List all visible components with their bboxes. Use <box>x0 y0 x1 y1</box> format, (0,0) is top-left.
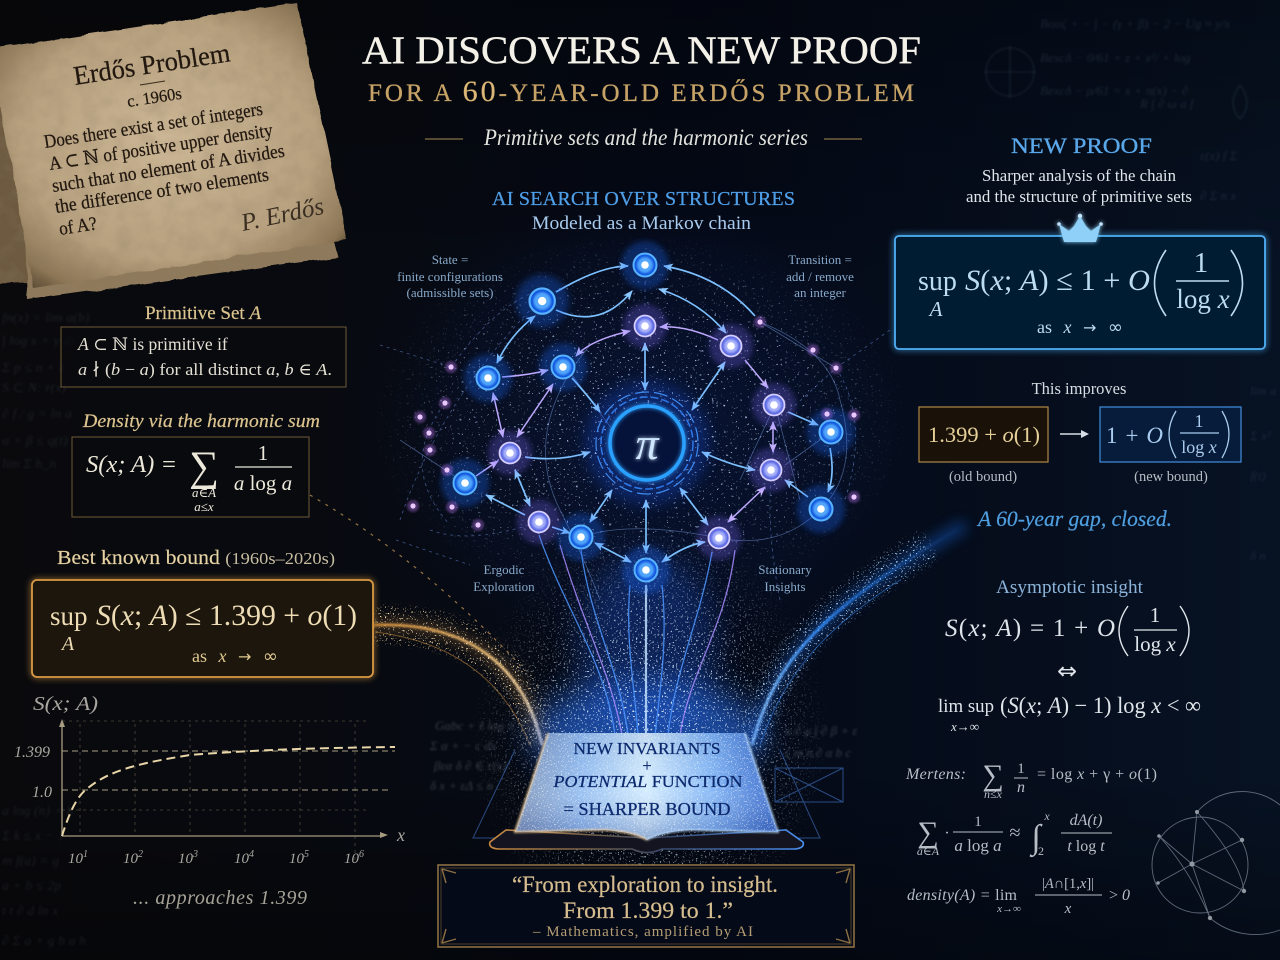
background handwritten math, left and right margins: α + β ≤ q(t) <box>2 434 68 449</box>
book page text: NEW INVARIANTS <box>574 739 720 758</box>
signature: P. Erdős <box>238 193 326 237</box>
formula: Mertens: ∑ <box>982 759 1004 792</box>
axis labels: 1 <box>83 849 88 860</box>
annotation: state: finite configurations <box>397 269 503 284</box>
background handwritten math, left and right margins: βεα δ ∂ ∈ r(x) <box>433 758 507 773</box>
axis labels: 6 <box>359 849 364 860</box>
formula: Mertens: = log x + γ + o(1) <box>1037 766 1157 783</box>
background handwritten math, left and right margins: Σ p ≤ n + k <box>1 361 66 376</box>
new bound box: 1 <box>1194 411 1204 431</box>
background handwritten math, left and right margins: ∂ Σ n x <box>1200 188 1236 203</box>
glowing trail: gold, from best-known bound to book <box>310 495 570 760</box>
formula: density limit: > 0 <box>1108 887 1130 904</box>
curve <box>62 747 395 836</box>
background handwritten math, left and right margins: Bexcδ − 0/61 + z + x²/ + log <box>1040 50 1191 65</box>
heading: Erdős Problem: Erdős Problem <box>71 37 232 91</box>
background handwritten math, left and right margins: ∂ f / g = ln a <box>2 407 72 422</box>
formula: Mertens: 1 <box>1017 761 1025 777</box>
axis labels: 10 <box>234 849 254 867</box>
panel: harmonic sum formula: a≤x <box>194 499 214 514</box>
problem statement text: of A? <box>58 213 98 240</box>
panel: best known bound formula: S(x; A) ≤ 1.399 + o(1) <box>96 599 357 632</box>
quote text <box>512 872 778 940</box>
background handwritten math, left and right margins: lim Σ h_n <box>2 457 56 472</box>
panel: primitive set definition: a ∤ (b − a) for all distinct a, b ∈ A. <box>78 360 332 379</box>
heading: AI search over structures: Modeled as a Markov chain <box>532 213 752 234</box>
annotation: stationary insights <box>758 562 812 594</box>
formula: density limit: density(A) = lim <box>907 887 1018 904</box>
fountain of light rising from the book into the network <box>474 526 824 864</box>
formula: sum approximated by integral: · <box>944 825 950 842</box>
node <box>709 324 753 368</box>
annotation: ergodic exploration: Exploration <box>473 579 535 594</box>
node <box>749 448 793 492</box>
formula: sum approximated by integral: t log t <box>1067 838 1105 855</box>
axis labels: 10 <box>123 849 143 867</box>
panel: harmonic sum formula: a log a <box>234 471 292 495</box>
annotation: ergodic exploration: Ergodic <box>484 562 525 577</box>
panel: asymptotic insight: lim sup <box>938 696 994 717</box>
date: c. 1960s <box>126 84 183 111</box>
panel: asymptotic insight: (S(x; A) − 1) log x < ∞ <box>1000 693 1201 718</box>
axis labels: 10 <box>178 849 198 867</box>
panel: new proof bound formula: log x <box>1176 284 1230 314</box>
formula: density limit: |A∩[1,x]| <box>1042 876 1094 892</box>
problem statement text: A ⊂ ℕ of positive upper density <box>48 120 275 175</box>
new bound box <box>1100 407 1241 462</box>
formula: Mertens: n≤x <box>984 787 1003 801</box>
panel: harmonic sum formula: a∈A <box>192 485 216 500</box>
panel: asymptotic insight: x→∞ <box>950 719 979 734</box>
text: this improves: This improves <box>1032 379 1126 398</box>
small state dots <box>407 316 860 531</box>
panel: new proof bound formula: 1 <box>1194 247 1208 279</box>
new bound box: log x <box>1181 437 1217 457</box>
bound captions <box>949 469 1208 485</box>
background handwritten math, left and right margins: t t ∂ d ln x <box>2 904 59 919</box>
paper note: Erdős problem <box>0 3 347 300</box>
panel: asymptotic insight <box>938 577 1201 734</box>
node <box>464 354 512 402</box>
annotation: transition: an integer <box>794 285 846 300</box>
annotation: stationary insights: Stationary <box>758 562 812 577</box>
background handwritten math, left and right margins: a log (n) + b <box>2 804 74 819</box>
panel: new proof bound formula: A <box>928 297 943 321</box>
panel: asymptotic insight: log x <box>1134 632 1176 656</box>
axis labels: 4 <box>249 849 254 860</box>
book page text <box>552 739 743 819</box>
problem statement text: the difference of two elements <box>54 165 270 218</box>
heading: primitive set: Primitive Set A <box>145 303 261 324</box>
panel: primitive set definition: A ⊂ ℕ is primitive if <box>77 334 228 354</box>
background handwritten math, left and right margins: Σ α + − c dx <box>429 738 497 753</box>
formula: sum approximated by integral: ∫ <box>1029 819 1043 858</box>
book page text: POTENTIAL FUNCTION <box>552 772 743 791</box>
arrow: old to new <box>1060 430 1089 438</box>
panel: harmonic sum formula: ∑ <box>189 444 219 490</box>
panel: best known bound formula: sup <box>50 601 88 631</box>
central pi node <box>585 381 709 505</box>
background handwritten math, left and right margins: ∂ Σ a + g b a h <box>2 934 86 949</box>
node <box>697 516 741 560</box>
background handwritten math, left and right margins: δ x + εΔ ≤ n <box>430 778 493 793</box>
annotation: state: (admissible sets) <box>406 285 494 300</box>
formula: sum approximated by integral: ≈ <box>1010 822 1021 844</box>
quote box <box>438 865 854 947</box>
node <box>516 275 569 328</box>
panel: best known bound formula: A <box>60 633 75 655</box>
formula: sum approximated by integral: a log a <box>954 836 1002 855</box>
axis labels: 10 <box>289 849 309 867</box>
background handwritten math, left and right margins: f(t) <box>1250 468 1266 483</box>
node <box>797 485 845 533</box>
background handwritten math, left and right margins: S ⊂ N: r(x) <box>2 381 67 396</box>
axis labels <box>14 693 405 867</box>
axis labels: 2 <box>138 849 143 860</box>
book page text: = SHARPER BOUND <box>564 799 730 819</box>
formula: sum approximated by integral: ∑ <box>917 816 939 849</box>
icon: wireframe sphere <box>1152 792 1280 935</box>
old bound box: 1.399 + o(1) <box>928 422 1040 447</box>
formula: Mertens: n <box>1017 779 1025 796</box>
background handwritten math, left and right margins: m f(a) = g <box>2 854 59 869</box>
panel: new proof bound formula: S(x; A) ≤ 1 + O <box>965 264 1150 297</box>
node <box>557 513 605 561</box>
node <box>621 241 669 289</box>
blue nebula particle field <box>370 230 910 610</box>
problem statement text: such that no element of A divides <box>51 141 286 197</box>
node <box>622 546 670 594</box>
node <box>517 500 561 544</box>
chart caption: ... approaches 1.399 <box>133 887 307 909</box>
panel: new proof bound formula <box>895 236 1265 349</box>
callout: 60-year gap closed: A 60-year gap, closed. <box>976 506 1172 531</box>
heading: new proof <box>966 133 1192 206</box>
background handwritten math, left and right margins: Gαbc + ℓ log π <box>435 718 514 733</box>
annotation: state <box>397 252 503 300</box>
node <box>752 383 796 427</box>
background handwritten math, left and right margins: lim a <box>1250 383 1277 398</box>
icon: crown <box>1057 214 1103 242</box>
heading: density via harmonic sum: Density via the harmonic sum <box>82 412 320 432</box>
formula: Mertens: Mertens: <box>905 766 966 783</box>
annotation: transition <box>786 252 854 300</box>
formula: density limit <box>907 876 1130 917</box>
background handwritten math, left and right margins: R ∫ ∂ ω a f <box>1139 96 1196 112</box>
heading: AI search over structures <box>492 188 795 234</box>
node <box>441 459 489 507</box>
background handwritten math, left and right margins: Bααζ + − ∫ − (γ + β) − 2 − Ug ≈ y/x <box>1040 16 1230 32</box>
node <box>807 408 855 456</box>
formula: sum approximated by integral: a∈A <box>917 844 940 858</box>
background handwritten math, left and right margins: a ∂ μ ∫ ∂ β + ε <box>785 723 858 739</box>
formula: sum approximated by integral <box>917 809 1112 858</box>
line chart: S(x;A) approaching 1.399 <box>14 693 405 867</box>
quote text: – Mathematics, amplified by AI <box>532 924 753 940</box>
axis labels: S(x; A) <box>33 693 98 715</box>
open book <box>473 730 843 852</box>
heading: new proof: and the structure of primitive sets <box>966 187 1192 206</box>
formula: sum approximated by integral: x <box>1043 809 1050 823</box>
axis labels: 1.399 <box>14 744 50 761</box>
quote text: “From exploration to insight. <box>512 872 778 898</box>
formula: sum approximated by integral: 2 <box>1038 844 1044 858</box>
panel: asymptotic insight: ⇔ <box>1057 657 1077 685</box>
subtitle: FOR A 60-YEAR-OLD ERDŐS PROBLEM <box>368 75 914 108</box>
problem statement text <box>43 99 286 240</box>
formula: density limit: x→∞ <box>996 903 1021 915</box>
background handwritten math, left and right margins: Σ k ≤ x − 1 <box>1 829 64 844</box>
panel: primitive set definition <box>61 327 346 387</box>
old bound box <box>919 407 1048 462</box>
node <box>488 431 532 475</box>
title <box>362 29 921 150</box>
new bound box: 1 + O <box>1106 423 1163 448</box>
axis labels: 5 <box>304 849 309 860</box>
annotation: state: State = <box>432 252 468 267</box>
heading: new proof: NEW PROOF <box>1011 133 1152 158</box>
panel: best known bound formula: as x → ∞ <box>192 646 278 667</box>
book page text: + <box>642 756 652 775</box>
axis labels: 3 <box>192 849 198 860</box>
panel: asymptotic insight: Asymptotic insight <box>996 577 1144 598</box>
annotation: stationary insights: Insights <box>764 579 806 594</box>
node <box>623 304 667 348</box>
axis labels: x <box>396 825 405 845</box>
glowing trail: blue, from book to new proof <box>730 525 965 760</box>
annotation: ergodic exploration <box>473 562 535 594</box>
title: AI DISCOVERS A NEW PROOF <box>362 29 921 72</box>
panel: asymptotic insight: S(x; A) = 1 + O <box>945 615 1115 642</box>
panel: harmonic sum formula <box>72 437 309 517</box>
formula: sum approximated by integral: 1 <box>974 814 982 830</box>
formula: sum approximated by integral: dA(t) <box>1070 812 1102 829</box>
panel: harmonic sum formula: 1 <box>258 441 268 465</box>
background handwritten math, left and right margins: Σ x² <box>1249 428 1272 443</box>
heading: best known bound: Best known bound (1960s–2020s) <box>57 547 335 569</box>
background handwritten math, left and right margins: ζ m n ∂ α b c <box>785 745 851 760</box>
background handwritten math, left and right margins: a + b ≤ 2p <box>2 879 61 894</box>
axis labels: 10 <box>68 849 88 867</box>
axis labels: 10 <box>344 849 364 867</box>
panel: new proof bound formula: as x → ∞ <box>1037 317 1123 338</box>
heading: new proof: Sharper analysis of the chain <box>982 166 1176 185</box>
annotation: transition: add / remove <box>786 269 854 284</box>
tagline: Primitive sets and the harmonic series <box>483 125 808 150</box>
axis labels: 1.0 <box>32 784 52 801</box>
panel: new proof bound formula: sup <box>918 266 957 297</box>
problem statement text: Does there exist a set of integers <box>43 99 264 153</box>
bound captions: (new bound) <box>1134 469 1208 485</box>
panel: harmonic sum formula: S(x; A) = <box>86 452 177 478</box>
formula: Mertens <box>905 759 1157 801</box>
background handwritten math, left and right margins: ε(x) f Σ <box>1200 148 1238 163</box>
background handwritten math, left and right margins: ∫ log x + y dz <box>1 334 76 349</box>
node <box>539 343 587 391</box>
Markov chain network <box>380 241 890 600</box>
panel: best known bound formula <box>32 580 373 677</box>
heading: AI search over structures: AI SEARCH OVER STRUCTURES <box>492 188 795 210</box>
bound captions: (old bound) <box>949 469 1017 485</box>
background handwritten math, left and right margins: Bexcδ − ρ/61 = x + π(x) − ∂ <box>1040 83 1188 98</box>
annotation: transition: Transition = <box>788 252 852 267</box>
panel: asymptotic insight: 1 <box>1150 603 1160 627</box>
background handwritten math, left and right margins: δ n <box>1250 548 1266 563</box>
background handwritten math, left and right margins: fn(x) = lim a(b) <box>2 311 90 326</box>
central pi node: π <box>635 418 660 469</box>
quote text: From 1.399 to 1.” <box>563 898 733 924</box>
formula: density limit: x <box>1064 901 1072 917</box>
